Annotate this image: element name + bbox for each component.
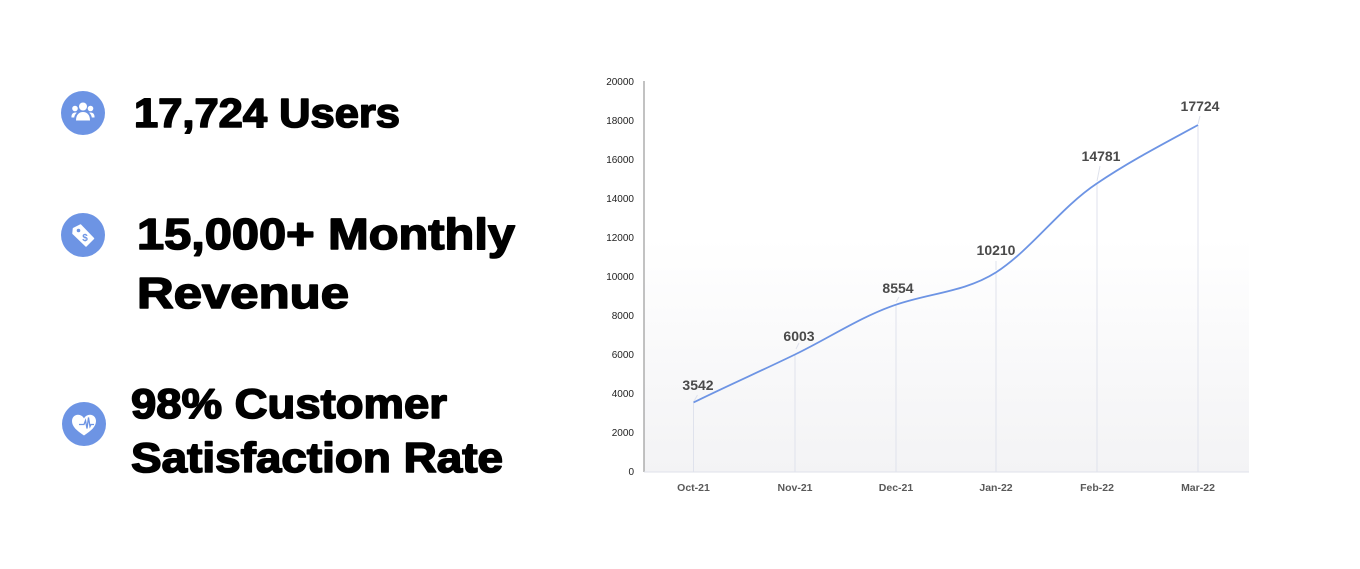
x axis labels: Mar-22 xyxy=(1181,482,1215,494)
y axis: 16000 xyxy=(606,155,634,166)
heading: 98% Customer Satisfaction Rate: 98% Customer xyxy=(131,380,447,427)
y axis: 12000 xyxy=(606,233,634,244)
data labels: 10210 xyxy=(977,242,1016,258)
y axis: 6000 xyxy=(612,350,634,361)
x axis labels: Dec-21 xyxy=(879,482,913,494)
y axis: 14000 xyxy=(606,194,634,205)
data labels: 6003 xyxy=(783,328,815,344)
data labels: 17724 xyxy=(1181,98,1220,114)
data line xyxy=(694,125,1198,402)
data labels: 14781 xyxy=(1082,148,1121,164)
plot background xyxy=(644,238,1249,472)
y axis xyxy=(606,77,1249,478)
icon: heart with pulse xyxy=(62,402,106,446)
heading: 15,000+ Monthly Revenue: Revenue xyxy=(137,269,349,318)
y axis: 10000 xyxy=(606,272,634,283)
heading: 98% Customer Satisfaction Rate xyxy=(131,380,503,481)
drop lines xyxy=(694,116,1200,472)
data labels xyxy=(682,98,1220,393)
heading: 98% Customer Satisfaction Rate: Satisfaction Rate xyxy=(131,434,503,481)
y axis: 4000 xyxy=(612,389,634,400)
x axis labels: Nov-21 xyxy=(777,482,813,494)
icon: price tag xyxy=(61,213,105,257)
heading: 15,000+ Monthly Revenue: 15,000+ Monthly xyxy=(137,210,516,259)
line chart: users by month xyxy=(606,77,1249,494)
y axis: 0 xyxy=(628,467,634,478)
y axis: 20000 xyxy=(606,77,634,88)
x axis labels: Oct-21 xyxy=(677,482,710,494)
y axis: 18000 xyxy=(606,116,634,127)
y axis: 2000 xyxy=(612,428,634,439)
data labels: 8554 xyxy=(882,280,914,296)
x axis labels xyxy=(677,482,1215,494)
x axis labels: Feb-22 xyxy=(1080,482,1114,494)
y axis: 8000 xyxy=(612,311,634,322)
heading: 15,000+ Monthly Revenue xyxy=(137,210,516,318)
icon: price tag: $ xyxy=(82,233,88,244)
heading: 17,724 Users: 17,724 Users xyxy=(134,90,400,136)
x axis labels: Jan-22 xyxy=(979,482,1013,494)
data labels: 3542 xyxy=(682,377,714,393)
icon: users xyxy=(61,91,105,135)
